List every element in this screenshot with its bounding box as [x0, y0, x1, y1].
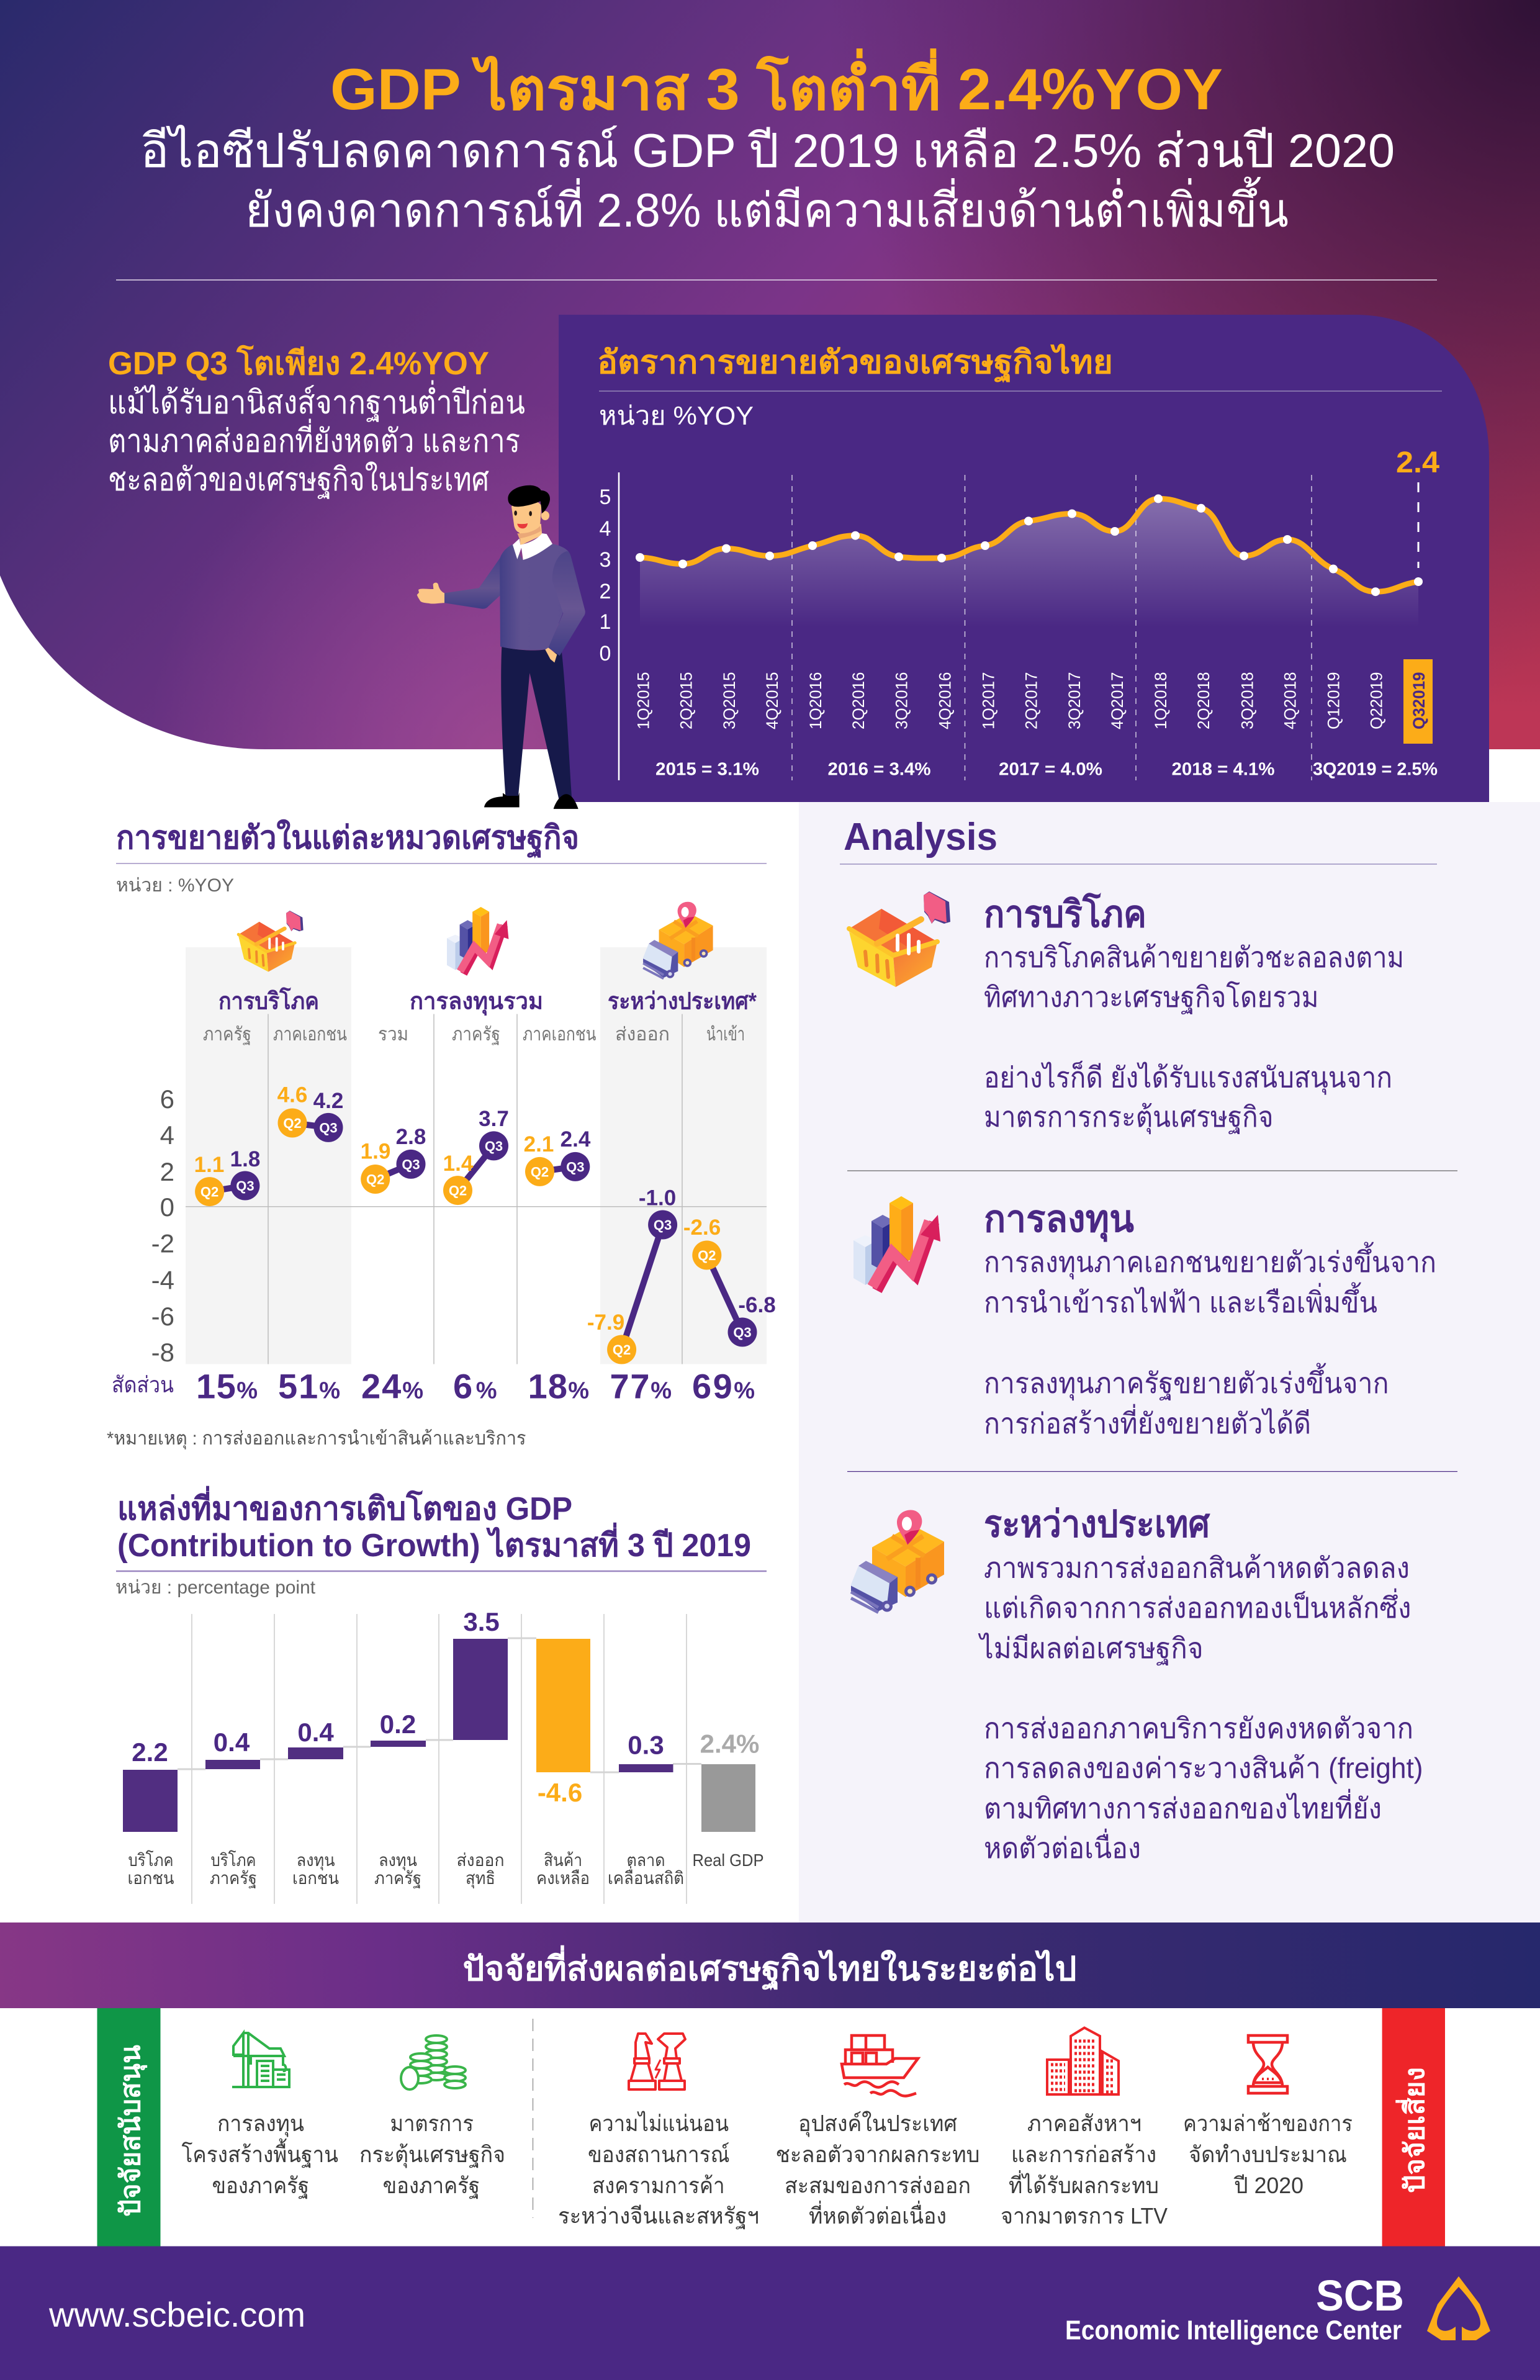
analysis item: consumption: การบริโภค: [984, 892, 1146, 935]
annual growth labels: [655, 760, 1438, 780]
unit label: หน่วย : percentage point: [115, 1577, 316, 1598]
sub-category labels: รวม: [378, 1024, 408, 1045]
annual growth labels: 2018 = 4.1%: [1172, 760, 1275, 780]
section heading: (Contribution to Growth) ไตรมาสที่ 3 ปี 2019: [117, 1523, 751, 1564]
quarter labels: 1Q2015: [634, 672, 653, 729]
growth curve: [640, 498, 1418, 592]
bar category labels: คงเหลือ: [536, 1868, 590, 1888]
quarter labels: 3Q2017: [1065, 672, 1084, 729]
bar values: 0.2: [380, 1710, 416, 1739]
quarter labels: Q22019: [1367, 672, 1385, 729]
value labels: 2.4: [561, 1127, 591, 1152]
factor: trade war uncertainty: ของสถานการณ์: [588, 2142, 730, 2167]
quarter labels: 4Q2016: [936, 672, 955, 729]
panel: Thai GDP growth chart: [559, 315, 1489, 802]
analysis item: international: การส่งออกภาคบริการยังคงหดตัวจาก: [984, 1712, 1413, 1744]
value labels: 4.2: [313, 1089, 343, 1113]
footnote: *หมายเหตุ : การส่งออกและการนำเข้าสินค้าและบริการ: [107, 1428, 526, 1450]
section: growth by economic category: [107, 819, 776, 1450]
factor: trade war uncertainty: สงครามการค้า: [592, 2173, 725, 2198]
category headings: การลงทุนรวม: [410, 988, 543, 1016]
marker labels: Q3: [654, 1217, 672, 1233]
share row: 15%: [196, 1367, 258, 1405]
analysis item: international: หดตัวต่อเนื่อง: [984, 1828, 1141, 1864]
website: www.scbeic.com: [48, 2295, 305, 2334]
value labels: 4.6: [277, 1083, 307, 1107]
quarter labels: 3Q2016: [893, 672, 911, 729]
factor: infrastructure investment: [181, 2033, 338, 2199]
share row: 18%: [528, 1367, 589, 1405]
category headings: [218, 987, 757, 1016]
share row: สัดส่วน: [112, 1372, 174, 1397]
quarter labels: 1Q2018: [1151, 672, 1170, 729]
analysis item: international: การลดลงของค่าระวางสินค้า (freight): [984, 1752, 1423, 1784]
bar category labels: บริโภค: [128, 1850, 174, 1870]
marker labels: Q2: [613, 1342, 631, 1358]
bar values: 3.5: [463, 1607, 500, 1636]
SCB wordmark: SCB: [1316, 2271, 1404, 2320]
icon: chess pieces: [629, 2034, 685, 2089]
banner: factors heading: [0, 1922, 1540, 2008]
factor: stimulus measures: กระตุ้นเศรษฐกิจ: [359, 2142, 505, 2168]
bar values: 2.4%: [700, 1729, 759, 1759]
sub-category labels: ภาคเอกชน: [273, 1024, 347, 1045]
factor: stimulus measures: [359, 2035, 505, 2199]
factor: budget delay: [1183, 2035, 1353, 2198]
value labels: [194, 1083, 776, 1335]
share row: 24%: [361, 1367, 423, 1405]
section heading: แหล่งที่มาของการเติบโตของ GDP: [117, 1486, 572, 1527]
bar category labels: ตลาด: [627, 1850, 665, 1870]
bar category labels: Real GDP: [693, 1850, 763, 1870]
bar category labels: ลงทุน: [379, 1850, 417, 1871]
factor: weak domestic demand: ชะลอตัวจากผลกระทบ: [776, 2142, 979, 2167]
y axis labels: [151, 1084, 174, 1367]
marker labels: Q3: [733, 1325, 752, 1340]
main title: อีไอซีปรับลดคาดการณ์ GDP ปี 2019 เหลือ 2.5% ส่วนปี 2020: [140, 124, 1395, 178]
value labels: -6.8: [738, 1293, 776, 1317]
summary text block: [108, 344, 525, 498]
quarter labels: 4Q2015: [763, 672, 781, 729]
y axis labels: 2: [160, 1157, 174, 1186]
summary text block: ตามภาคส่งออกที่ยังหดตัว และการ: [108, 418, 520, 459]
factor: infrastructure investment: ของภาครัฐ: [212, 2173, 309, 2199]
factor: real estate: [1001, 2027, 1168, 2229]
latest value callout: 2.4: [1396, 446, 1439, 479]
factor: weak domestic demand: [776, 2035, 979, 2229]
analysis heading: Analysis: [844, 816, 997, 859]
quarter labels: 1Q2016: [806, 672, 825, 729]
bar category labels: เอกชน: [128, 1868, 174, 1888]
icon: crane and building: [232, 2033, 290, 2087]
analysis item: consumption: [849, 891, 1404, 1135]
bar category labels: บริโภค: [211, 1850, 256, 1870]
quarter labels: 3Q2018: [1238, 672, 1257, 729]
analysis item: consumption: การบริโภคสินค้าขยายตัวชะลอลงตาม: [984, 941, 1404, 973]
sub-category labels: ภาครัฐ: [203, 1024, 251, 1045]
annual growth labels: 3Q2019 = 2.5%: [1313, 760, 1438, 780]
annual growth labels: 2015 = 3.1%: [655, 760, 759, 780]
analysis item: international: ตามทิศทางการส่งออกของไทยที่ยัง: [984, 1788, 1382, 1824]
header gradient background with curved lower-left corner: [0, 0, 1540, 749]
panel: analysis: [840, 816, 1457, 1864]
main title: GDP ไตรมาส 3 โตต่ำที่ 2.4%YOY: [330, 48, 1223, 122]
factor: weak domestic demand: อุปสงค์ในประเทศ: [798, 2111, 957, 2137]
bar values: 2.2: [132, 1738, 168, 1767]
illustration: presenter man: [417, 485, 585, 809]
bar category labels: ภาครัฐ: [374, 1868, 421, 1888]
marker labels: Q2: [200, 1184, 218, 1200]
y axis labels: 4: [160, 1120, 174, 1150]
icon: buildings: [1047, 2027, 1119, 2094]
risk factors tab: ปัจจัยเสี่ยง: [1395, 2067, 1430, 2193]
y axis labels: 3: [600, 548, 611, 572]
analysis item: international: ระหว่างประเทศ: [984, 1503, 1210, 1544]
Q2 markers: [195, 1109, 721, 1364]
share row: [112, 1367, 755, 1405]
factor: real estate: ภาคอสังหาฯ: [1027, 2111, 1141, 2136]
SCB logo: [1427, 2276, 1490, 2340]
share row: 77%: [610, 1367, 672, 1405]
highlighted quarter tag: [1403, 659, 1433, 744]
section: contribution to growth: [115, 1486, 767, 1904]
y axis labels: 5: [600, 485, 611, 509]
bar values: -4.6: [538, 1778, 582, 1807]
main title: ยังคงคาดการณ์ที่ 2.8% แต่มีความเสี่ยงด้านต่ำเพิ่มขึ้น: [245, 176, 1289, 237]
marker labels: Q3: [402, 1156, 420, 1172]
analysis item: investment: การลงทุน: [984, 1198, 1134, 1242]
marker labels: Q2: [366, 1172, 384, 1187]
bar category labels: สุทธิ: [466, 1868, 495, 1889]
bar category labels: ลงทุน: [297, 1850, 335, 1871]
analysis item: consumption: ทิศทางภาวะเศรษฐกิจโดยรวม: [984, 981, 1318, 1014]
factor: infrastructure investment: การลงทุน: [217, 2111, 304, 2137]
connectors: [210, 1123, 742, 1350]
quarter labels: 3Q2015: [720, 672, 739, 729]
y axis labels: [600, 485, 611, 665]
quarter labels: 4Q2017: [1108, 672, 1127, 729]
analysis item: international: [851, 1503, 1423, 1864]
quarter labels: Q12019: [1324, 672, 1343, 729]
factor: budget delay: จัดทำงบประมาณ: [1189, 2142, 1347, 2167]
value labels: 1.4: [443, 1152, 474, 1176]
quarter labels: Q32019: [1410, 672, 1428, 729]
panel: factors row: [0, 2008, 1540, 2247]
share row: 51%: [278, 1367, 340, 1405]
analysis item: investment: การลงทุนภาครัฐขยายตัวเร่งขึ้นจาก: [984, 1363, 1389, 1401]
y axis labels: -8: [151, 1338, 174, 1367]
annual growth labels: 2017 = 4.0%: [999, 760, 1102, 780]
annual growth labels: 2016 = 3.4%: [828, 760, 931, 780]
icon: basket: [238, 911, 304, 972]
marker labels: Q3: [319, 1120, 338, 1135]
factor: weak domestic demand: สะสมของการส่งออก: [785, 2173, 971, 2198]
area under curve: [640, 498, 1418, 627]
quarter labels: 2Q2017: [1022, 672, 1040, 729]
sub-category labels: ส่งออก: [615, 1024, 670, 1045]
value labels: 2.1: [524, 1132, 554, 1156]
bars: [123, 1639, 755, 1832]
value labels: -1.0: [639, 1186, 676, 1210]
bar values: 0.3: [628, 1731, 664, 1759]
quarter labels: [634, 672, 1428, 729]
value labels: 1.8: [230, 1147, 260, 1171]
risk factors tab: [1382, 2008, 1445, 2247]
y axis labels: -6: [151, 1302, 174, 1331]
analysis item: investment: [853, 1196, 1436, 1440]
value labels: 1.9: [361, 1140, 390, 1164]
factor: trade war uncertainty: [558, 2034, 759, 2230]
factor: stimulus measures: ของภาครัฐ: [383, 2173, 480, 2199]
line chart: [600, 446, 1439, 780]
y axis labels: 0: [600, 642, 611, 665]
main title: [140, 48, 1395, 237]
value labels: 3.7: [479, 1107, 509, 1131]
factor: budget delay: ปี 2020: [1233, 2173, 1304, 2198]
unit label: หน่วย : %YOY: [116, 875, 234, 896]
bar values: 0.4: [297, 1718, 334, 1747]
dumbbell chart: [151, 902, 776, 1367]
unit label: หน่วย %YOY: [599, 401, 754, 430]
y axis labels: 4: [600, 517, 611, 541]
factor: infrastructure investment: โครงสร้างพื้นฐาน: [181, 2138, 338, 2168]
supporting factors tab: ปัจจัยสนับสนุน: [115, 2045, 148, 2217]
y axis labels: 6: [160, 1084, 174, 1114]
value labels: 1.1: [194, 1153, 224, 1177]
sub-category labels: [203, 1024, 745, 1045]
y axis labels: -2: [151, 1229, 174, 1258]
icon: cargo ship: [842, 2035, 918, 2096]
category headings: การบริโภค: [218, 987, 319, 1014]
marker labels: Q2: [531, 1164, 549, 1179]
factor: stimulus measures: มาตรการ: [390, 2111, 474, 2136]
bar category labels: เอกชน: [292, 1868, 339, 1888]
analysis item: consumption: มาตรการกระตุ้นเศรษฐกิจ: [984, 1101, 1274, 1135]
sub-category labels: นำเข้า: [706, 1024, 745, 1045]
summary text block: แม้ได้รับอานิสงส์จากฐานต่ำปีก่อน: [108, 380, 525, 421]
y axis labels: 0: [160, 1192, 174, 1222]
marker labels: Q3: [485, 1138, 503, 1154]
summary text block: GDP Q3 โตเพียง 2.4%YOY: [108, 344, 489, 382]
quarter labels: 4Q2018: [1281, 672, 1300, 729]
factor: real estate: จากมาตรการ LTV: [1001, 2203, 1168, 2229]
sub-category labels: ภาครัฐ: [452, 1024, 500, 1045]
value labels: 2.8: [396, 1125, 426, 1149]
SCB wordmark: Economic Intelligence Center: [1065, 2315, 1402, 2345]
section heading: [117, 1486, 751, 1564]
value labels: -2.6: [683, 1215, 721, 1240]
sub-category labels: ภาคเอกชน: [523, 1024, 596, 1045]
bar category labels: ภาครัฐ: [210, 1868, 257, 1888]
icon: basket: [849, 891, 950, 987]
factor: budget delay: ความล่าช้าของการ: [1183, 2111, 1353, 2136]
footer: [0, 2246, 1540, 2380]
quarter labels: 2Q2015: [677, 672, 695, 729]
marker labels: [200, 1116, 752, 1358]
data points: [636, 494, 1423, 596]
SCB wordmark: [1065, 2271, 1404, 2345]
analysis item: international: ไม่มีผลต่อเศรษฐกิจ: [978, 1632, 1204, 1666]
icon: coin stacks: [401, 2035, 466, 2089]
factor: trade war uncertainty: ความไม่แน่นอน: [589, 2111, 729, 2136]
y axis labels: -4: [151, 1265, 174, 1295]
marker labels: Q2: [283, 1116, 302, 1131]
share row: 6%: [453, 1367, 497, 1405]
Q3 markers: [230, 1113, 757, 1347]
waterfall chart: [123, 1607, 763, 1904]
factor: real estate: และการก่อสร้าง: [1011, 2142, 1156, 2167]
analysis item: international: แต่เกิดจากการส่งออกทองเป็นหลักซึ่ง: [984, 1588, 1412, 1624]
icon: investment chart: [853, 1196, 940, 1291]
quarter labels: 2Q2016: [849, 672, 868, 729]
icon: hourglass: [1248, 2035, 1287, 2093]
analysis item: investment: การนำเข้ารถไฟฟ้า และเรือเพิ่มขึ้น: [984, 1282, 1377, 1318]
summary text block: ชะลอตัวของเศรษฐกิจในประเทศ: [108, 461, 489, 498]
section heading: การขยายตัวในแต่ละหมวดเศรษฐกิจ: [116, 819, 579, 859]
y axis labels: 2: [600, 580, 611, 603]
marker labels: Q2: [449, 1183, 467, 1199]
bar values: 0.4: [214, 1728, 250, 1757]
page background: lavender analysis pane: [799, 802, 1540, 1922]
factor: weak domestic demand: ที่หดตัวต่อเนื่อง: [809, 2201, 947, 2229]
icon: investment chart: [447, 907, 508, 974]
bar values: [132, 1607, 759, 1807]
value labels: -7.9: [587, 1310, 624, 1335]
panel heading: อัตราการขยายตัวของเศรษฐกิจไทย: [597, 343, 1113, 383]
bar category labels: [128, 1850, 763, 1889]
factor: real estate: ที่ได้รับผลกระทบ: [1009, 2170, 1159, 2198]
analysis item: consumption: อย่างไรก็ดี ยังได้รับแรงสนับสนุนจาก: [984, 1060, 1392, 1095]
banner: factors heading: ปัจจัยที่ส่งผลต่อเศรษฐกิจไทยในระยะต่อไป: [463, 1945, 1076, 1991]
category headings: ระหว่างประเทศ*: [608, 988, 757, 1014]
factor: trade war uncertainty: ระหว่างจีนและสหรัฐฯ: [558, 2203, 759, 2230]
marker labels: Q2: [698, 1248, 716, 1263]
bar category labels: เคลื่อนสถิติ: [608, 1866, 684, 1888]
icon: delivery truck: [643, 902, 713, 978]
analysis item: investment: การก่อสร้างที่ยังขยายตัวได้ดี: [984, 1404, 1311, 1440]
share row: 69%: [692, 1367, 755, 1405]
bar category labels: สินค้า: [544, 1850, 582, 1870]
icon: delivery truck: [851, 1510, 944, 1613]
bar category labels: ส่งออก: [457, 1850, 504, 1870]
analysis item: international: ภาพรวมการส่งออกสินค้าหดตัวลดลง: [984, 1552, 1410, 1584]
supporting factors tab: [97, 2008, 160, 2247]
marker labels: Q3: [236, 1178, 254, 1194]
quarter labels: 1Q2017: [979, 672, 997, 729]
quarter labels: 2Q2018: [1194, 672, 1213, 729]
marker labels: Q3: [566, 1159, 584, 1174]
y axis labels: 1: [600, 610, 611, 634]
analysis item: investment: การลงทุนภาคเอกชนขยายตัวเร่งขึ้นจาก: [984, 1242, 1436, 1280]
